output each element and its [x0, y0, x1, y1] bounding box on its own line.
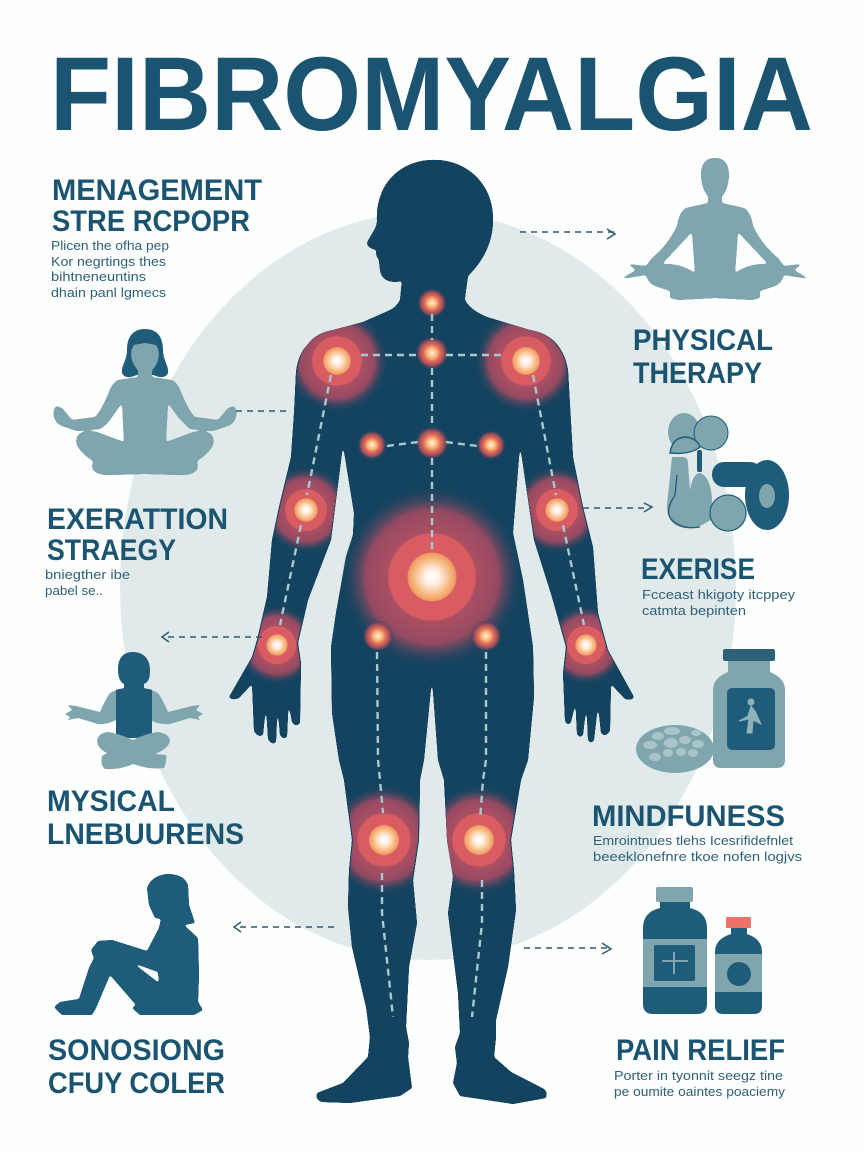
background circle: [120, 212, 736, 960]
arrow: to medicine bottles: [524, 943, 611, 954]
text block: exertion strategy: bniegther ibe: [45, 567, 130, 582]
torso and limbs: [229, 280, 634, 1104]
panel: physical therapy: [633, 324, 773, 390]
hair: [122, 329, 168, 377]
icon: pill bottle and pills: [636, 649, 785, 773]
panel: management: Kor negrtings thes: [51, 254, 167, 269]
arrow: pointing left to child: [162, 632, 262, 642]
icon: seated meditating woman: [53, 329, 237, 475]
arrow: woman to body: [236, 410, 291, 412]
meditating body: [53, 343, 237, 475]
heading: exercise: EXERISE: [641, 553, 755, 586]
pills: [643, 727, 704, 761]
panel: exertion strategy: STRAEGY: [47, 534, 176, 567]
panel: physical therapy: THERAPY: [633, 357, 762, 390]
heading: management: MENAGEMENT: [52, 174, 262, 207]
arrow: to meditating figure: [520, 229, 615, 239]
body figure with pain points: [229, 160, 634, 1104]
child crossed legs: [97, 732, 170, 769]
text block: mindfulness: Emrointnues tlehs Icesrifidefnlet: [593, 833, 793, 848]
head: [367, 160, 493, 305]
panel: pain relief: [614, 1034, 786, 1099]
panel: exertion strategy: [45, 503, 228, 598]
label figure: [739, 699, 761, 733]
body silhouette: [229, 160, 634, 1104]
child head and torso: [116, 652, 152, 738]
heading: exertion strategy: EXERATTION: [47, 503, 228, 536]
bottle label: [727, 688, 775, 750]
dashed nerve lines: [280, 314, 584, 1017]
bottle body: [713, 660, 785, 768]
bottle cap: [723, 649, 775, 661]
icon: meditating figure: [621, 158, 809, 300]
large bottle cap: [656, 887, 693, 902]
plus sign: [662, 952, 688, 974]
small bottle cap: [726, 917, 751, 928]
panel: pain relief: pe oumite oaintes poaciemy: [614, 1084, 786, 1099]
heading: physical therapy: PHYSICAL: [633, 324, 773, 357]
text block: exercise: Fcceast hkigoty itcppey: [642, 587, 796, 602]
small bottle body: [715, 926, 762, 1014]
panel: sonosiong: [48, 1034, 225, 1100]
panel: exercise: catmta bepinten: [642, 603, 746, 618]
text block: pain relief: Porter in tyonnit seegz tine: [614, 1068, 783, 1083]
panel: management: dhain panl lgmecs: [51, 285, 167, 300]
large bottle body: [643, 900, 707, 1014]
panel: management: bihtneneuntins: [51, 269, 147, 284]
panel: mysical: LNEBUURENS: [47, 818, 244, 851]
title: FIBROMYALGIA: [50, 36, 813, 153]
heading: sonosiong: SONOSIONG: [48, 1034, 225, 1067]
panel: exercise: [641, 553, 796, 618]
roller: [712, 462, 762, 487]
child arms: [65, 689, 203, 724]
small bottle label: [715, 954, 762, 992]
icon: seated child: [65, 652, 203, 769]
pain glows: [237, 288, 626, 896]
large bottle label: [643, 939, 707, 987]
boot shape: [667, 457, 712, 528]
text block: management: Plicen the ofha pep: [51, 238, 169, 253]
heading: mindfulness: MINDFUNESS: [592, 800, 785, 833]
pill plate: [636, 725, 714, 773]
icon: sitting silhouette: [54, 874, 203, 1015]
panel: mindfulness: [592, 800, 803, 864]
heading: mysical: MYSICAL: [47, 785, 175, 818]
panel: management: STRE RCPOPR: [52, 205, 250, 238]
blobs: [668, 413, 700, 451]
panel: sonosiong: CFUY COLER: [48, 1067, 225, 1100]
panel: mindfulness: beeeklonefnre tkoe nofen logjvs: [593, 849, 803, 864]
heading: pain relief: PAIN RELIEF: [616, 1034, 785, 1067]
panel: mysical: [47, 785, 244, 851]
panel: exertion strategy: pabel se..: [45, 583, 103, 598]
panel: management: [51, 174, 262, 300]
icon: exercise equipment: [667, 413, 789, 531]
arrow: to exercise icon: [583, 503, 652, 512]
arrow: pointing left to sitter: [234, 922, 335, 932]
icon: medicine bottles: [643, 887, 762, 1014]
